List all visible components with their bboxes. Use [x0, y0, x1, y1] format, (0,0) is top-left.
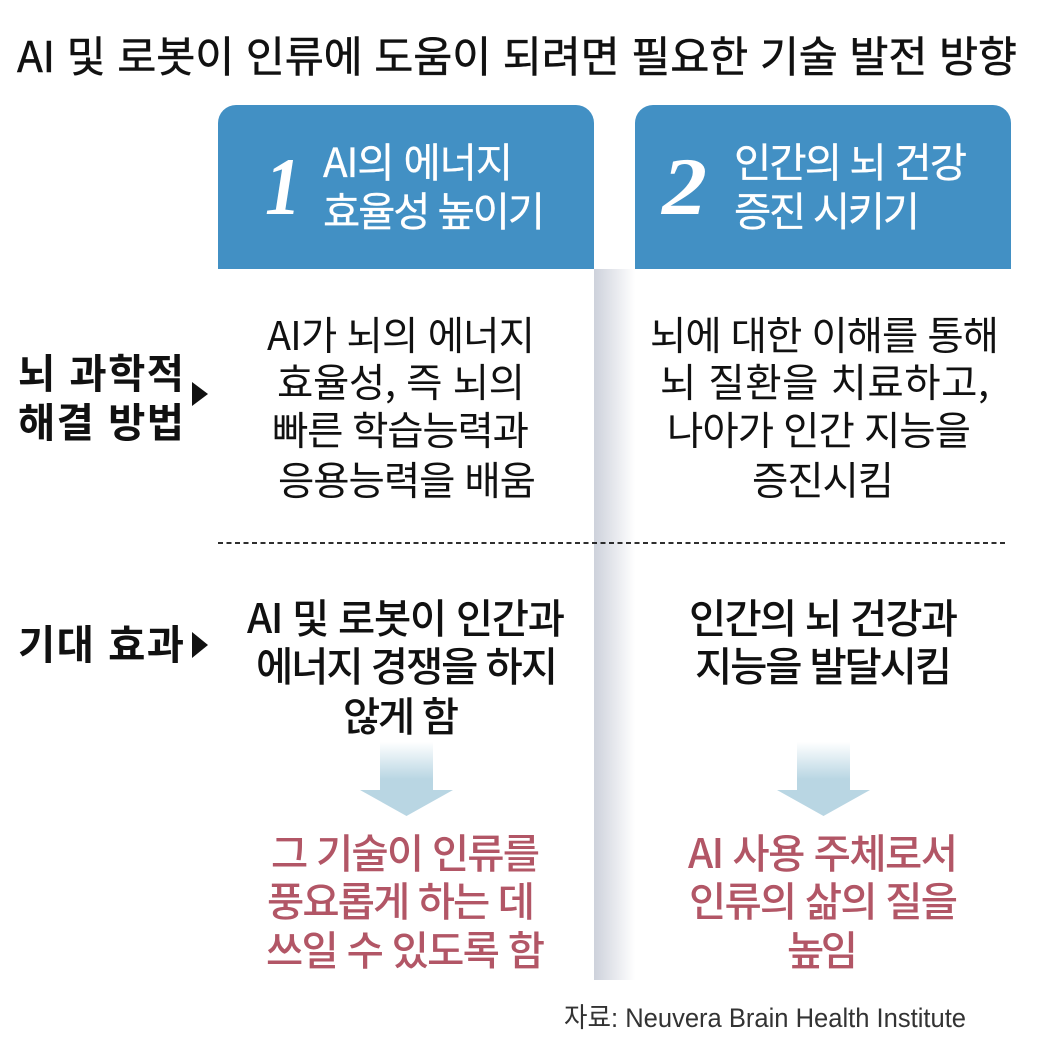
header 1 text: [323, 130, 545, 238]
number 1: 1: [265, 141, 301, 232]
text: effect 1: [247, 586, 565, 743]
row label: science solution: 뇌 과학적: [18, 341, 184, 400]
text: effect 2: [689, 586, 958, 693]
header 1 text: 효율성 높이기: [323, 179, 545, 238]
header 1 text: AI의 에너지: [323, 130, 513, 189]
panel: header 2: [635, 105, 1011, 269]
title: AI 및 로봇이 인류에 도움이 되려면 필요한 기술 발전 방향: [17, 24, 1017, 85]
text: solution 1: [267, 305, 536, 507]
row label: science solution: [18, 341, 184, 449]
text: solution 2: 나아가 인간 지능을: [667, 400, 971, 457]
text: outcome 2: [688, 821, 958, 977]
text: solution 1: 효율성, 즉 뇌의: [277, 352, 525, 409]
column divider band: [594, 269, 635, 980]
text: effect 2: 인간의 뇌 건강과: [689, 586, 958, 645]
text: effect 2: 지능을 발달시킴: [695, 634, 952, 693]
text: outcome 1: 쓰일 수 있도록 함: [266, 918, 545, 977]
divider: [218, 542, 1007, 544]
text: solution 2: 뇌에 대한 이해를 통해: [650, 305, 999, 362]
arrow down 1: [360, 742, 453, 816]
header 2 text: 증진 시키기: [734, 179, 920, 238]
text: effect 1: 에너지 경쟁을 하지: [256, 634, 558, 693]
source: 자료: Neuvera Brain Health Institute: [564, 1003, 966, 1033]
text: effect 1: 않게 함: [343, 684, 459, 743]
row label: science solution: 해결 방법: [18, 390, 184, 449]
text: solution 2: 뇌 질환을 치료하고,: [660, 352, 989, 409]
text: outcome 1: [266, 821, 545, 977]
text: effect 1: AI 및 로봇이 인간과: [247, 586, 565, 645]
text: outcome 2: 인류의 삶의 질을: [689, 869, 958, 928]
text: solution 1: AI가 뇌의 에너지: [267, 305, 535, 362]
icon: row arrow 2: [192, 632, 208, 658]
text: outcome 2: 높임: [787, 918, 858, 977]
text: outcome 1: 풍요롭게 하는 데: [267, 869, 535, 928]
panel: header 1: [218, 105, 594, 269]
text: solution 1: 빠른 학습능력과: [272, 400, 529, 457]
text: outcome 2: AI 사용 주체로서: [688, 821, 958, 880]
arrow down 2: [777, 742, 870, 816]
header 2 text: [734, 130, 967, 238]
row label: expected effect: 기대 효과: [18, 612, 184, 671]
text: solution 2: [650, 305, 999, 507]
number 2: 2: [661, 141, 707, 232]
text: solution 2: 증진시킴: [752, 450, 894, 507]
text: solution 1: 응용능력을 배움: [278, 450, 536, 507]
header 2 text: 인간의 뇌 건강: [734, 130, 967, 189]
text: outcome 1: 그 기술이 인류를: [271, 821, 540, 880]
icon: row arrow 1: [192, 382, 208, 406]
